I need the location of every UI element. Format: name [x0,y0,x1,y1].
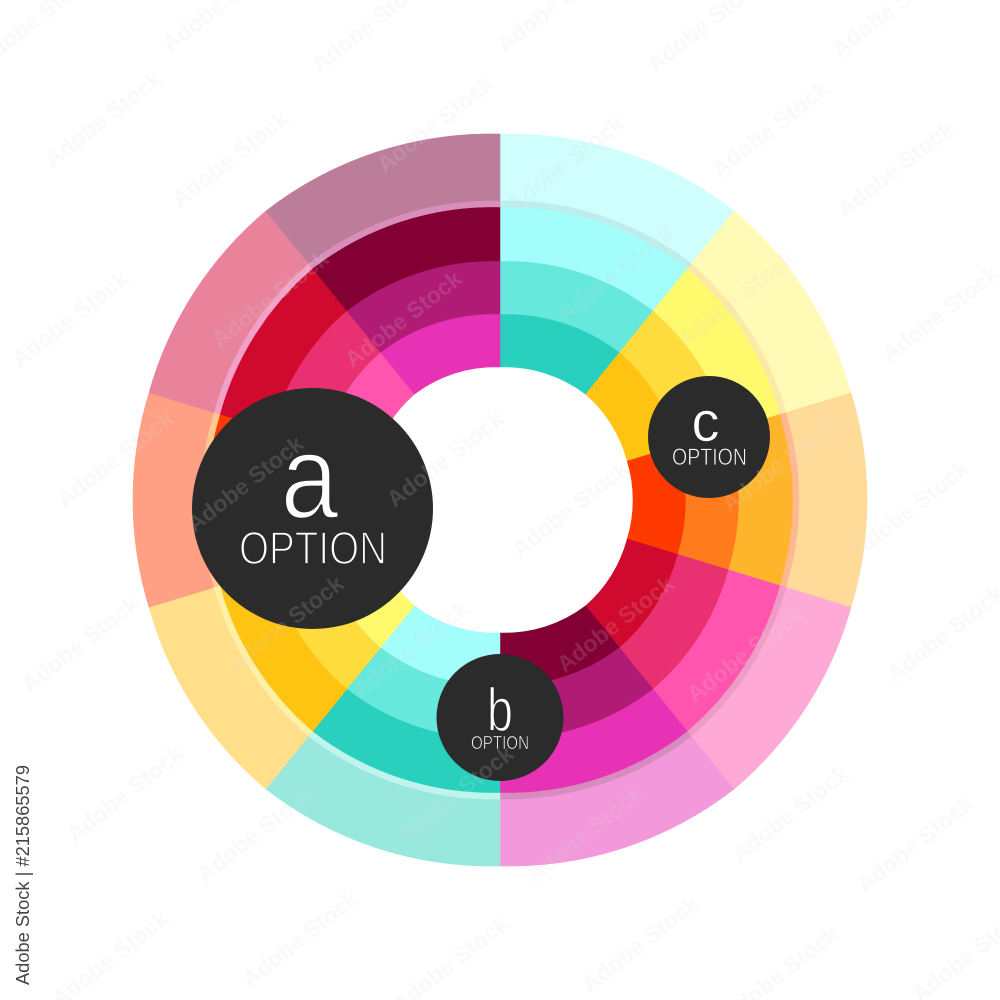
stock watermark pattern: Adobe Stock [17,590,144,697]
badge: option a [192,388,433,629]
stock watermark pattern: Adobe Stock [40,65,167,172]
stock watermark pattern: Adobe Stock [207,245,334,352]
stock watermark pattern: Adobe Stock [372,70,499,177]
stock watermark pattern: Adobe Stock [237,885,364,992]
letter a: a [280,410,339,544]
stock watermark pattern: Adobe Stock [717,410,844,517]
segment: rose upper left [149,211,414,461]
stock watermark pattern: Adobe Stock [727,760,854,867]
stock watermark pattern: Adobe Stock [707,75,834,182]
segment: orange right [627,393,867,607]
badge: option b [436,654,564,781]
stock watermark pattern: Adobe Stock [182,430,309,537]
letter b: b [487,676,513,744]
stock watermark pattern: Adobe Stock [392,740,519,847]
segment: pink lower right [586,539,851,789]
stock watermark pattern: Adobe Stock [52,405,179,512]
label OPTION: OPTION [471,733,529,753]
stock watermark pattern: Adobe Stock [577,890,704,997]
segment: teal bottom left [266,606,500,866]
stock watermark pattern: Adobe Stock [62,740,189,847]
stock watermark pattern: Adobe Stock [502,110,629,217]
segment: gold lower left [149,539,414,789]
donut wheel [133,134,867,866]
segment: cyan top [500,134,734,394]
stock watermark pattern: Adobe Stock [673,245,800,352]
stock watermark pattern: Adobe Stock [522,780,649,887]
stock watermark pattern: Adobe Stock [382,405,509,512]
stock id caption: Adobe Stock | #215865579 [13,765,33,985]
segment: coral left [133,393,373,607]
stock watermark pattern: Adobe Stock [347,595,474,702]
letter c: c [692,390,720,454]
stock watermark pattern: Adobe Stock [832,115,959,222]
segment: yellow upper right [586,211,851,461]
stock watermark pattern: Adobe Stock [877,260,1000,367]
stock watermark pattern: Adobe Stock [552,220,679,327]
stock watermark pattern: Adobe Stock [847,455,974,562]
stock watermark pattern: Adobe Stock [192,780,319,887]
stock watermark pattern: Adobe Stock [7,265,134,372]
segment: maroon top left [266,134,500,394]
stock watermark pattern: Adobe Stock [507,455,634,562]
stock watermark pattern: Adobe Stock [852,790,979,897]
stock watermark pattern: Adobe Stock [340,265,467,372]
label OPTION: OPTION [239,522,387,574]
stock watermark pattern: Adobe Stock [682,600,809,707]
segment: magenta bottom right [500,606,734,866]
stock watermark pattern: Adobe Stock [552,570,679,677]
stock watermark pattern: Adobe Stock [167,105,294,212]
stock watermark pattern: Adobe Stock [222,570,349,677]
label OPTION: OPTION [672,444,747,471]
badge: option c [648,376,770,498]
